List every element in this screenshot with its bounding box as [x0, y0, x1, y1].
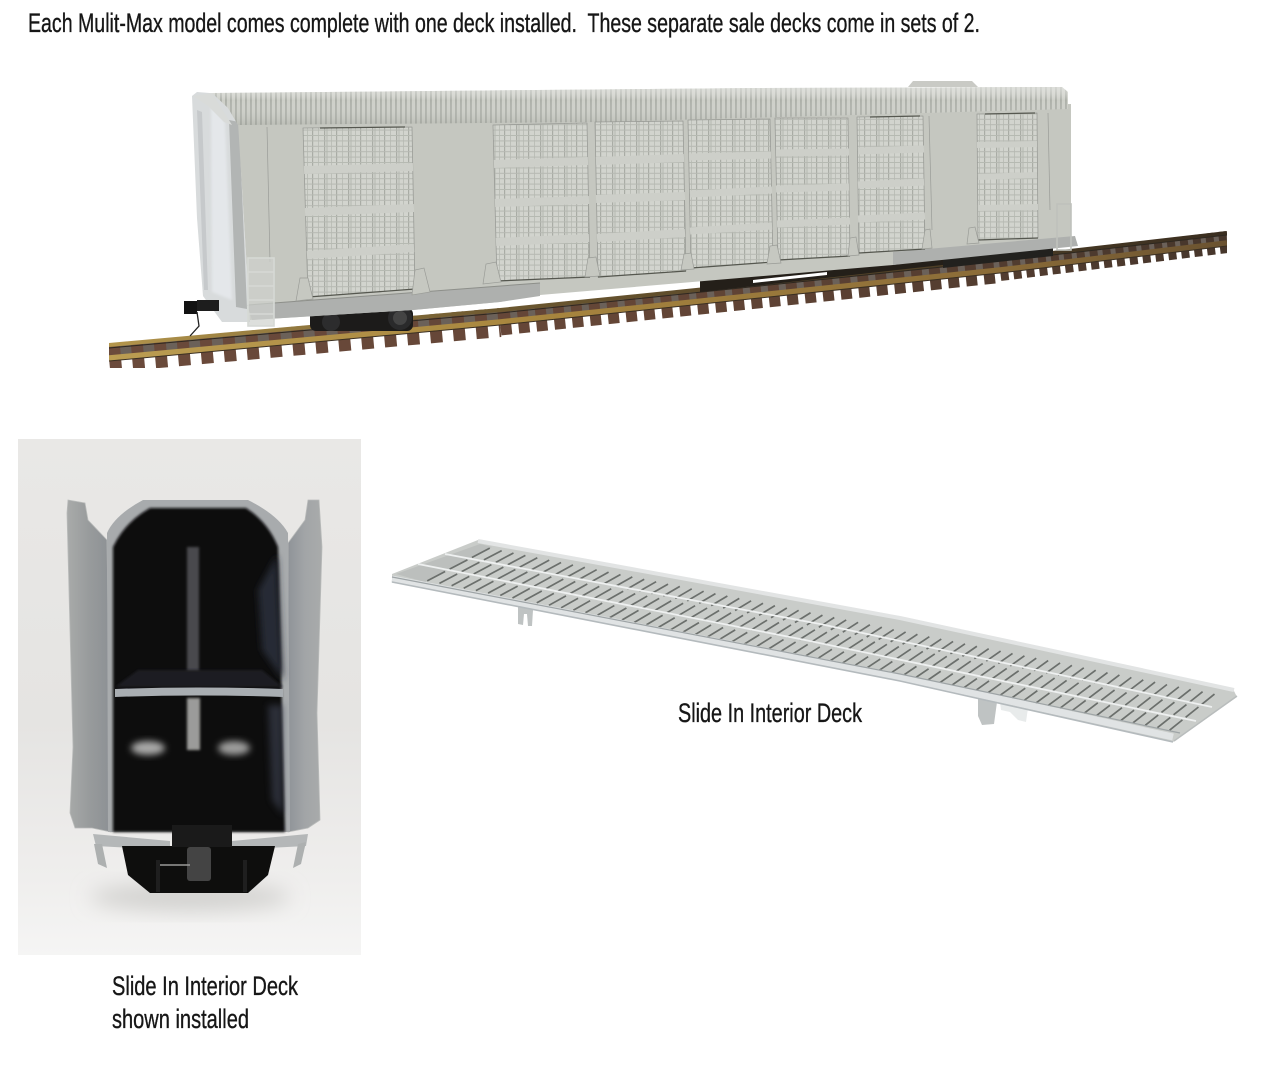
car end wall [192, 92, 250, 322]
caption: shown installed [112, 971, 298, 1034]
truck and coupler underframe [122, 825, 275, 893]
coupler [184, 300, 219, 336]
underframe and trucks [310, 246, 1053, 331]
caption: shown installed: shown installed [112, 1004, 249, 1034]
caption: deck: Slide In Interior Deck [678, 698, 862, 728]
door panels [303, 113, 1038, 297]
dark interior [113, 508, 285, 832]
roof [193, 81, 1068, 125]
open door right [288, 500, 322, 832]
floor shadow [90, 883, 290, 911]
side panel lines and gussets [267, 113, 1050, 301]
interior wall tone [258, 555, 283, 680]
deck legs [518, 606, 1028, 725]
car end frame [107, 500, 290, 832]
end sills [93, 834, 308, 868]
slot rows [425, 547, 1216, 732]
deck floor far section [115, 670, 283, 687]
deck base plate [392, 540, 1237, 742]
plain end panel [396, 544, 492, 582]
installed deck edge [115, 688, 283, 697]
track [109, 233, 1227, 361]
car side body [238, 104, 1071, 320]
centre light bar [187, 547, 199, 672]
sill [247, 236, 1078, 320]
caption: shown installed: Slide In Interior Deck [112, 971, 298, 1001]
open door left [67, 500, 111, 832]
row separators [418, 554, 1212, 721]
photo: deck shown installed, end view [18, 439, 361, 955]
reflections [131, 741, 250, 755]
ladder end [248, 204, 1071, 326]
slide in interior deck [392, 540, 1237, 742]
front rail [392, 577, 1237, 742]
back rail [478, 541, 1234, 690]
autorack car on track photo [109, 81, 1227, 361]
